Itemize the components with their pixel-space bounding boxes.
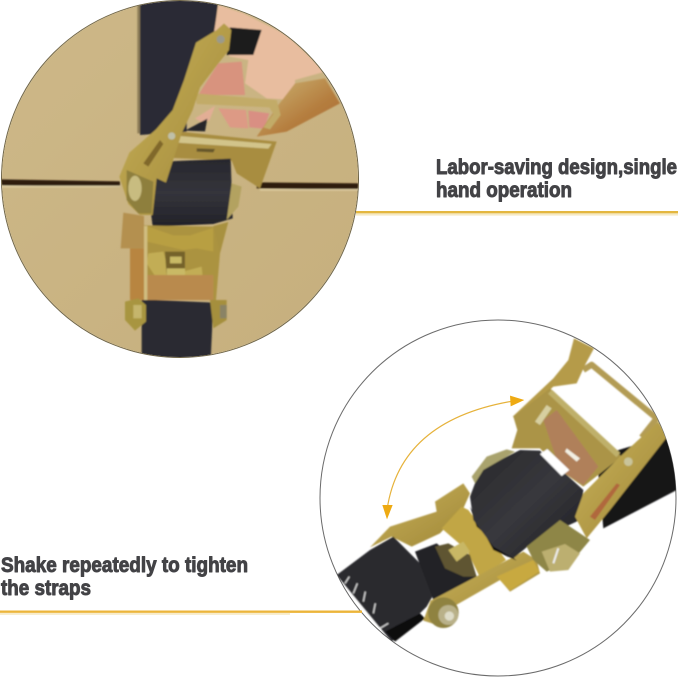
heading: labor-saving line 2: hand operation	[436, 179, 572, 202]
callout: labor-saving	[356, 156, 678, 216]
callout: shake to tighten	[0, 554, 362, 615]
icon: double-headed swing arrow	[382, 396, 524, 519]
heading: shake line 2: the straps	[1, 577, 91, 600]
panel: hand operating ratchet on boxes	[0, 0, 360, 360]
heading: shake line 1: Shake repeatedly to tighten	[1, 554, 248, 577]
panel: ratchet handle swing	[320, 320, 679, 676]
